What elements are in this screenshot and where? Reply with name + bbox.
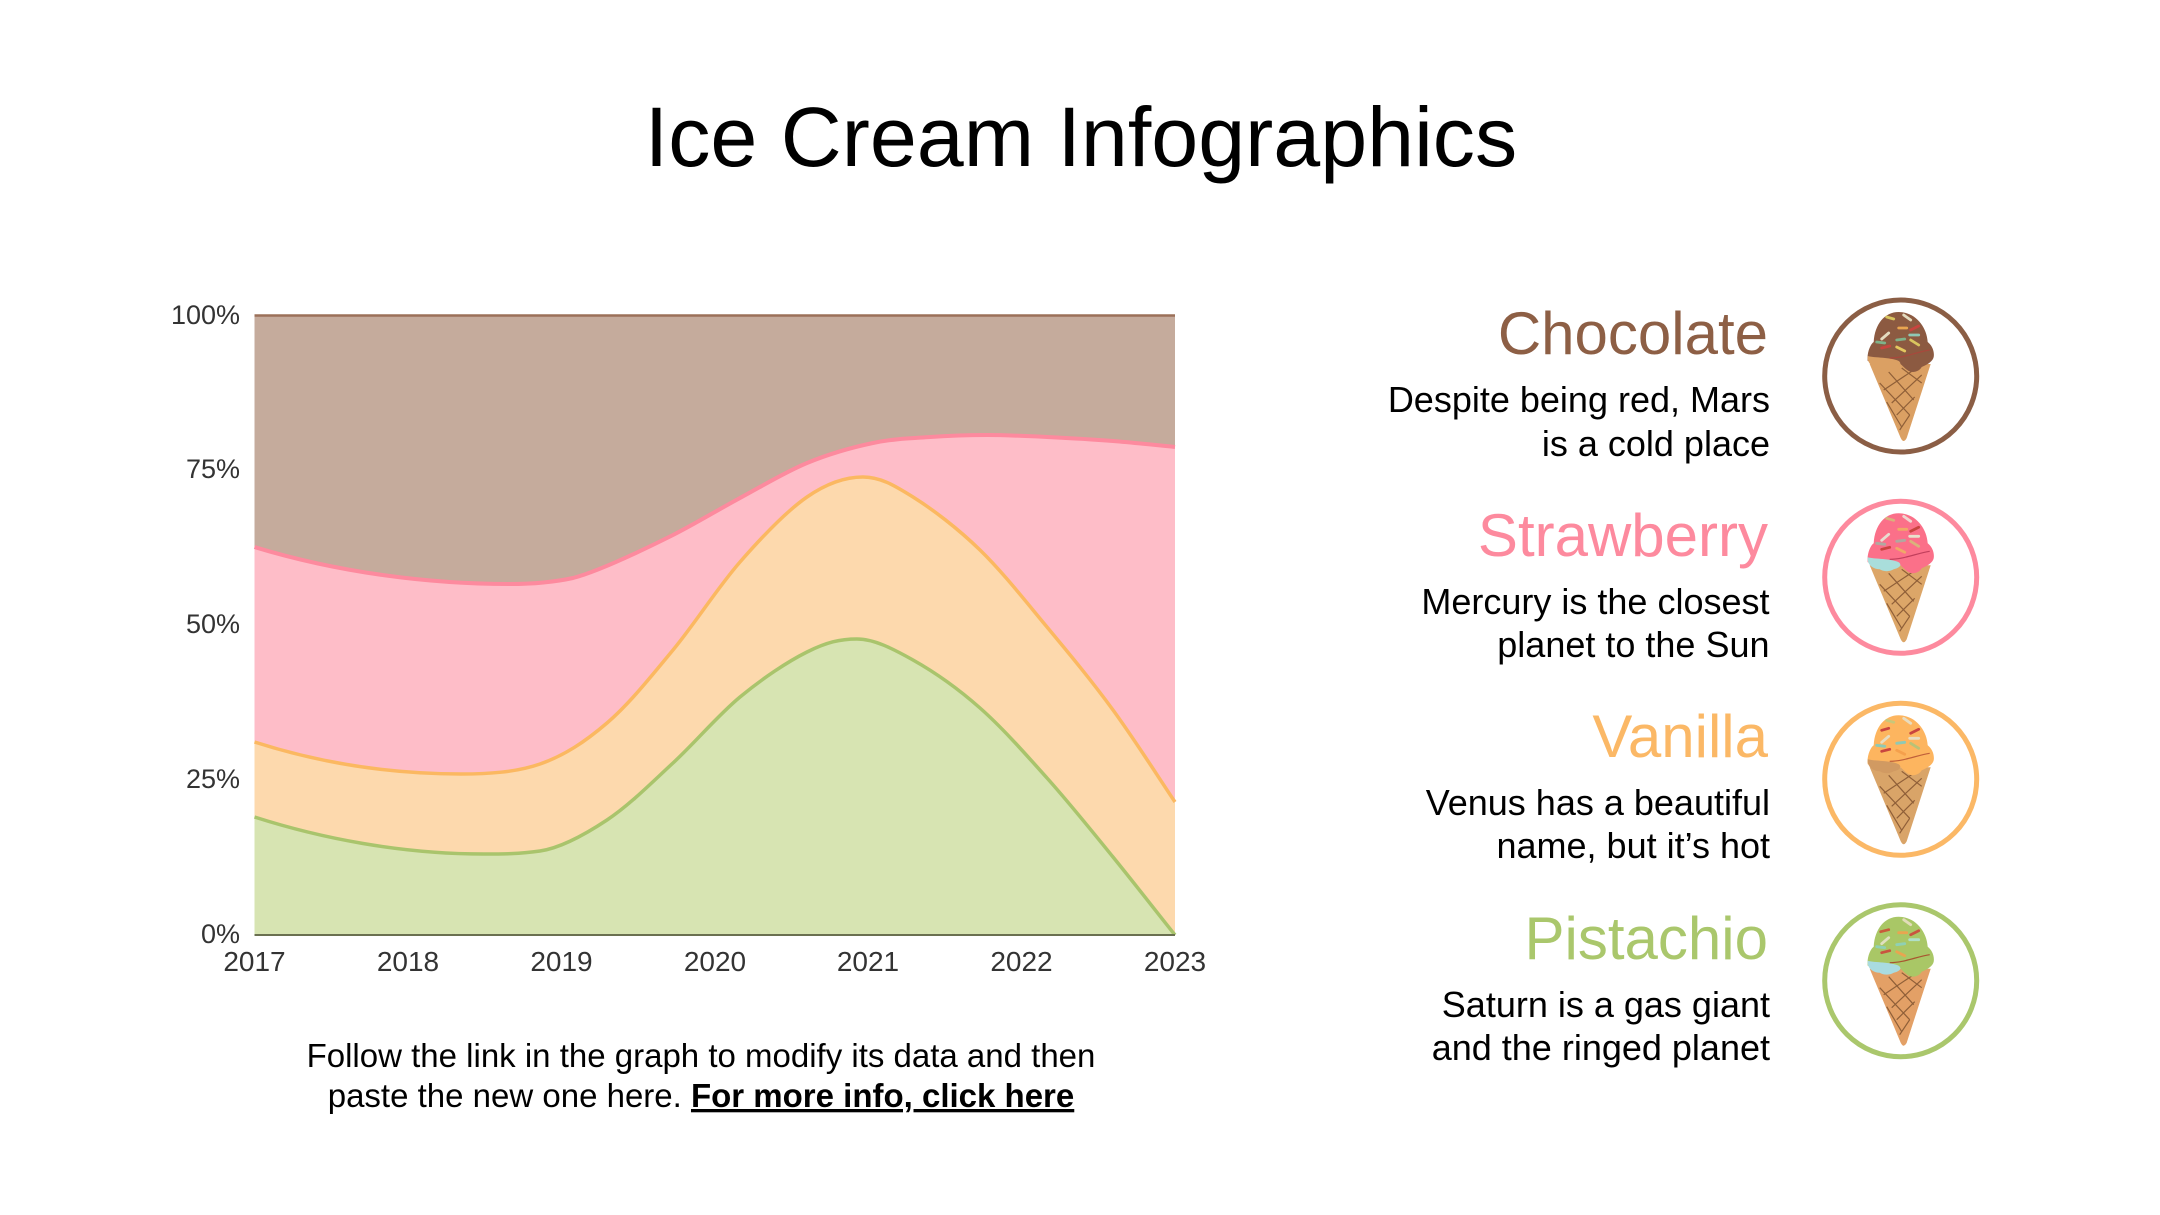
icon: vanilla ice cream <box>1825 703 1977 855</box>
x axis baseline <box>254 934 1175 936</box>
heading: vanilla: Vanilla <box>1592 703 1769 770</box>
line: pistachio <box>254 639 1175 935</box>
item: vanilla <box>1426 703 1977 866</box>
description: chocolate: Despite being red, Mars <box>1388 379 1770 420</box>
item: strawberry <box>1421 501 1977 665</box>
area: chocolate <box>254 315 1175 935</box>
area: vanilla <box>254 477 1175 935</box>
heading: chocolate: Chocolate <box>1498 300 1768 367</box>
x axis labels: 2021 <box>837 946 899 977</box>
description: pistachio: Saturn is a gas giant <box>1442 984 1770 1025</box>
x axis labels: 2020 <box>684 946 746 977</box>
description: strawberry <box>1421 581 1770 665</box>
icon: strawberry ice cream <box>1825 501 1977 653</box>
y axis labels: 100% <box>171 300 240 330</box>
x axis labels <box>223 946 1206 977</box>
description: vanilla: Venus has a beautiful <box>1426 782 1770 823</box>
y axis labels: 75% <box>186 454 240 484</box>
item: pistachio <box>1432 905 1977 1068</box>
x axis labels: 2018 <box>377 946 439 977</box>
icon: chocolate ice cream <box>1825 300 1977 452</box>
y axis labels: 25% <box>186 764 240 794</box>
icon: pistachio ice cream <box>1825 905 1977 1057</box>
x axis labels: 2017 <box>223 946 286 977</box>
x axis labels: 2023 <box>1144 946 1206 977</box>
x axis labels: 2019 <box>530 946 593 977</box>
description: chocolate <box>1388 379 1770 464</box>
x axis labels: 2022 <box>990 946 1053 977</box>
heading: pistachio: Pistachio <box>1525 905 1768 972</box>
item: chocolate <box>1388 300 1977 464</box>
line: strawberry <box>254 435 1175 584</box>
line: vanilla <box>254 477 1175 802</box>
title: Ice Cream Infographics <box>645 90 1517 184</box>
y axis labels: 50% <box>186 609 240 639</box>
description: strawberry: planet to the Sun <box>1497 624 1770 665</box>
chart caption: paste the new one here. For more info, click here <box>328 1077 1074 1114</box>
description: strawberry: Mercury is the closest <box>1421 581 1770 622</box>
description: pistachio: and the ringed planet <box>1432 1027 1770 1068</box>
chart caption: Follow the link in the graph to modify its data and then <box>307 1037 1095 1074</box>
area: strawberry <box>254 435 1175 935</box>
description: pistachio <box>1432 984 1770 1068</box>
stacked area chart <box>171 300 1206 977</box>
area: pistachio <box>254 639 1175 935</box>
description: chocolate: is a cold place <box>1542 423 1770 464</box>
y axis labels: 0% <box>201 919 240 949</box>
description: vanilla: name, but it’s hot <box>1496 825 1770 866</box>
description: vanilla <box>1426 782 1770 866</box>
line: chocolate top edge <box>254 314 1175 317</box>
y axis labels <box>171 300 240 949</box>
chart caption <box>307 1037 1095 1114</box>
heading: strawberry: Strawberry <box>1478 502 1768 569</box>
